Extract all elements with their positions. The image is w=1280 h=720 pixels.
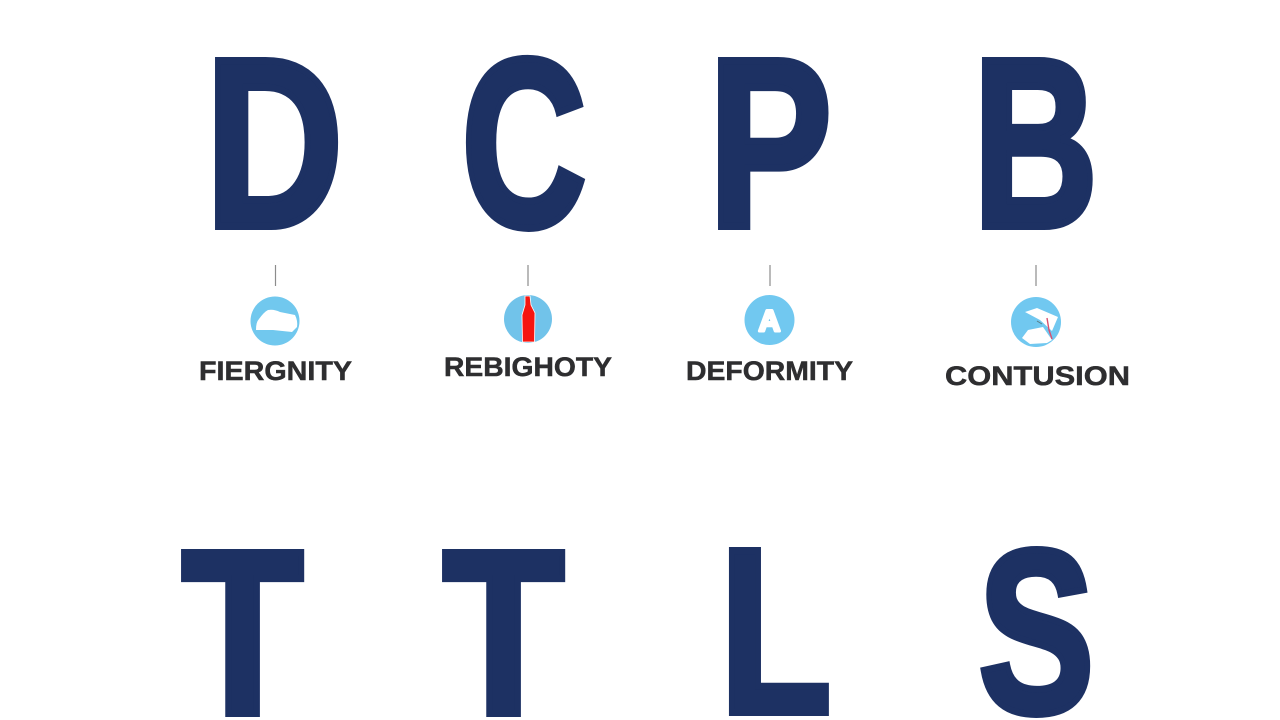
connector line 3: [769, 265, 771, 286]
label: FIERGNITY: FIERGNITY: [199, 356, 352, 386]
label: REBIGHOTY: REBIGHOTY: [444, 352, 612, 382]
letter B: B: [973, 9, 1098, 278]
icon: red bottle shape: [504, 295, 552, 343]
connector line 1: [274, 265, 276, 286]
letter P: P: [708, 8, 832, 278]
letter D: D: [205, 9, 343, 278]
label: DEFORMITY: DEFORMITY: [686, 356, 853, 386]
connector line 2: [527, 265, 529, 286]
icon: contusion shape: [1011, 297, 1061, 347]
connector line 4: [1035, 265, 1037, 286]
icon: swelling blob: [250, 296, 300, 346]
label: CONTUSION: CONTUSION: [945, 361, 1130, 391]
icon: letter A: [744, 295, 794, 345]
letter C: C: [461, 10, 587, 278]
icon: letter A: A: [759, 305, 780, 338]
